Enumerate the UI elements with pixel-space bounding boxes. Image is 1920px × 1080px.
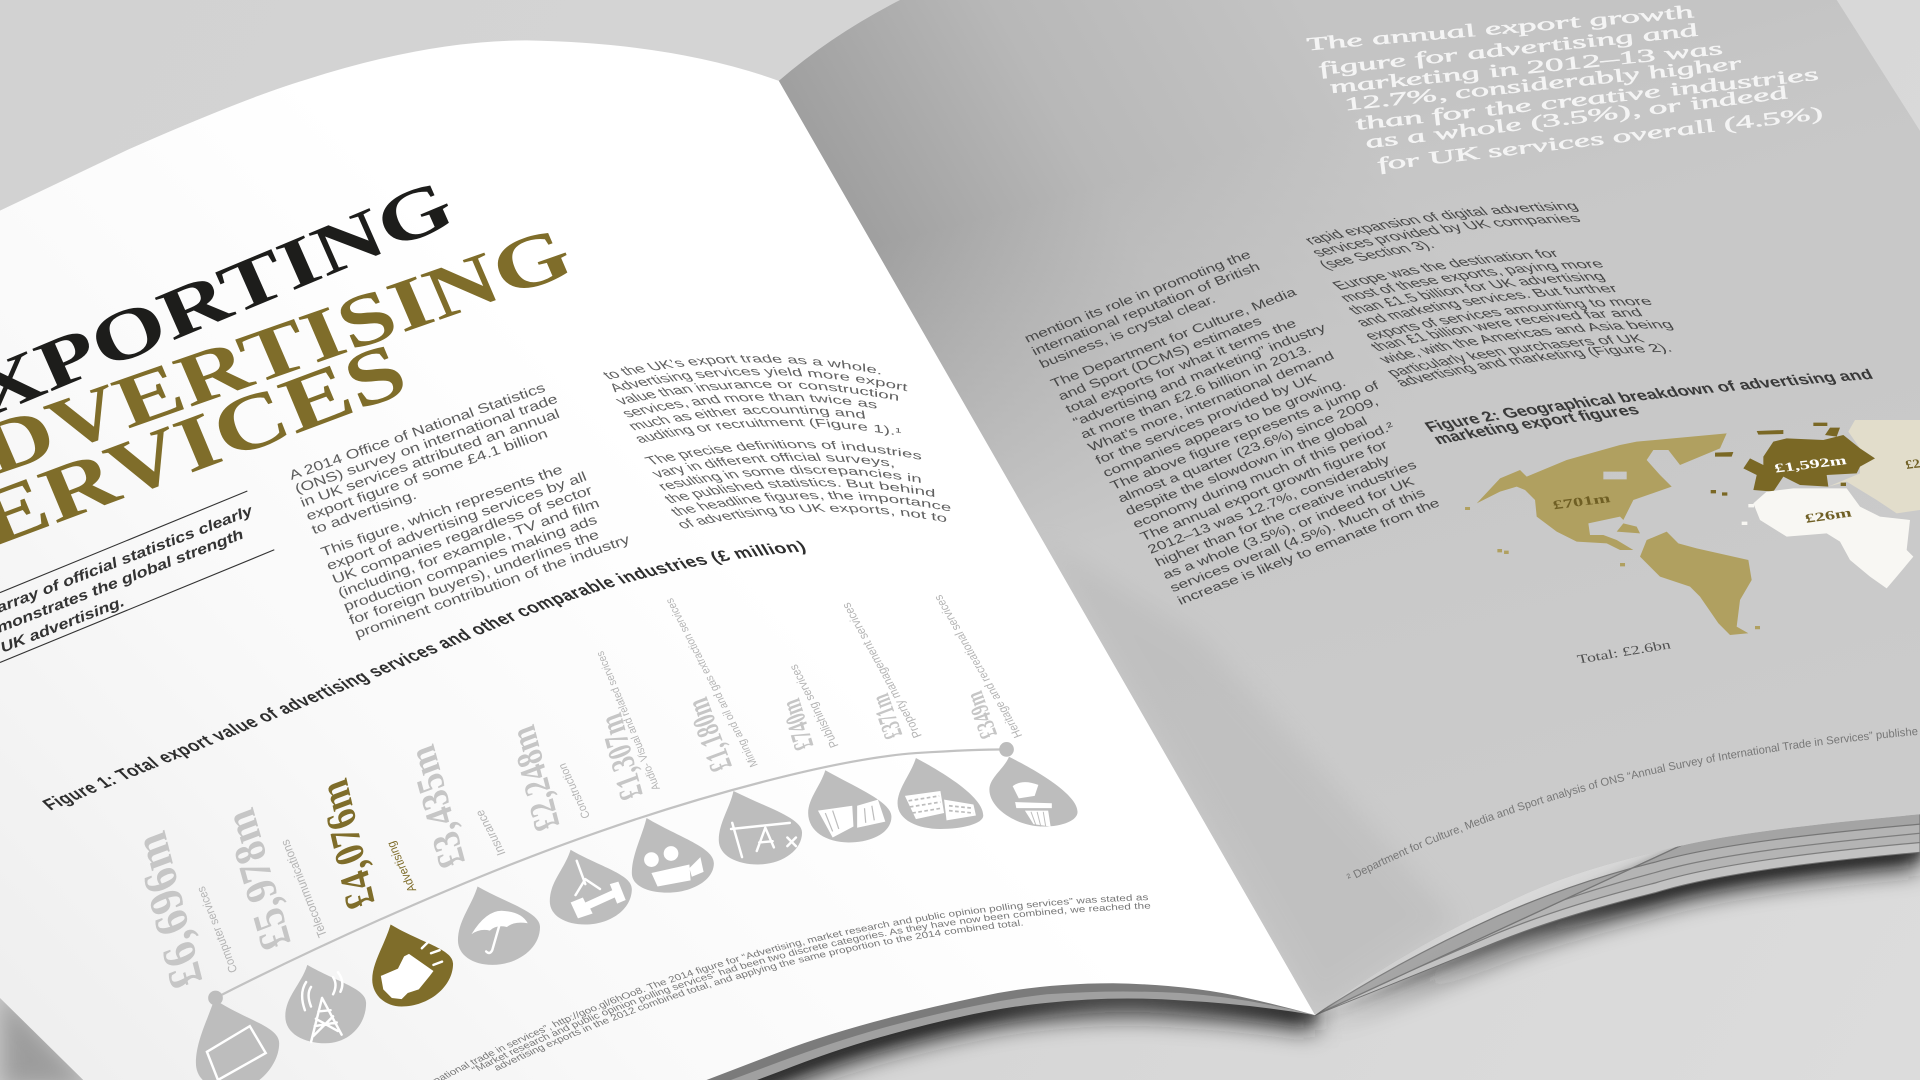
text column: right page column one: mention its role in promoting the bbox=[1022, 248, 1253, 346]
text column: left page column two bbox=[603, 354, 950, 528]
pull quote: 12.7%, considerably higher bbox=[1339, 53, 1747, 114]
value: heritage: Heritage and recreational services bbox=[932, 593, 1025, 739]
text column: right page column one: increase is likely to emanate from the bbox=[1175, 497, 1442, 608]
text column: left page column one: This figure, which represents the bbox=[319, 462, 565, 560]
icon: open book drop bbox=[808, 770, 891, 842]
text column: right page column one: despite the slowdown in the global bbox=[1123, 415, 1370, 518]
map region: Africa bbox=[1742, 488, 1913, 588]
value: telecommunications: Telecommunications bbox=[278, 838, 330, 940]
text column: right page column one: total exports for what it terms the bbox=[1063, 317, 1299, 416]
standfirst with rules bbox=[0, 491, 274, 675]
shadow under left page edge bbox=[0, 986, 98, 1080]
text column: left page column two: of advertising to UK exports, not to bbox=[679, 504, 946, 528]
text column: left page column one bbox=[287, 374, 632, 641]
figure 2: dotted world map bbox=[1465, 420, 1920, 635]
text column: right page column one: business, is crystal clear. bbox=[1037, 293, 1218, 371]
text column: right page column one: companies appears to be growing. bbox=[1101, 376, 1349, 480]
value: property management: Property management services bbox=[839, 601, 925, 740]
text column: right page column one: The Department for Culture, Media bbox=[1048, 286, 1300, 391]
text column: right page column two: (see Section 3). bbox=[1320, 240, 1434, 271]
text column: left page column two: the headline figures, the importance bbox=[671, 490, 950, 516]
page stack: right side sheets and shadow bbox=[1315, 735, 1920, 1030]
icon: heritage column drop bbox=[989, 757, 1078, 827]
value: property management: £371m bbox=[865, 690, 908, 743]
value: insurance: £3,435m bbox=[401, 739, 474, 874]
text column: right page column two: advertising and marketing (Figure 2). bbox=[1398, 344, 1672, 386]
map label: Europe value: £1,592m bbox=[1773, 453, 1849, 475]
value: construction: Construction bbox=[556, 761, 593, 820]
text column: left page column one: in UK services attributed an annual bbox=[298, 407, 562, 510]
pull quote: marketing in 2012–13 was bbox=[1325, 38, 1726, 97]
text column: right page column two: particularly keen purchasers of UK bbox=[1388, 334, 1645, 380]
text column: left page column two: the published statistics. But behind bbox=[664, 478, 934, 503]
value: insurance: Insurance bbox=[472, 808, 509, 857]
icon: megaphone drop bbox=[372, 924, 453, 1007]
footnote: left page: advertising exports in the 2012 combined total, and applying the same proportion to the 2014 combined total. bbox=[494, 920, 1023, 1070]
pull quote: The annual export growth bbox=[1301, 1, 1698, 54]
value: advertising: Advertising bbox=[385, 839, 419, 893]
icon: oil pump drop bbox=[719, 791, 802, 864]
text column: right page column two bbox=[1306, 202, 1674, 386]
text column: right page column one: international reputation of British bbox=[1030, 260, 1263, 359]
footnote: left page: “Market research and public opinion polling services” had been two discrete categories. As they have now been combined, we reached the bbox=[472, 902, 1150, 1071]
value: publishing: Publishing services bbox=[788, 662, 842, 749]
value: audio-visual: Audio- Visual and related services bbox=[594, 649, 663, 792]
value: advertising bbox=[311, 773, 419, 916]
text column: right page column one: almost a quarter (23.6%) since 2009, bbox=[1116, 395, 1381, 506]
value: computer services: Computer services bbox=[195, 884, 240, 974]
text column: right page column two: than £1.5 billion for UK advertising bbox=[1348, 272, 1606, 314]
text column: right page column two: than £1 billion were received far and bbox=[1371, 308, 1642, 351]
text column: left page column one: prominent contribution of the industry bbox=[353, 532, 632, 641]
value: construction: £2,248m bbox=[503, 720, 568, 837]
icon: film camera drop bbox=[632, 818, 714, 893]
text column: left page column one: (ONS) survey on international trade bbox=[293, 392, 560, 497]
icon: construction pipe drop bbox=[550, 850, 632, 924]
text column: right page column two: exports of services amounting to more bbox=[1367, 298, 1652, 340]
pull quote: as a whole (3.5%), or indeed bbox=[1360, 82, 1793, 152]
text column: left page column two: The precise definitions of industries bbox=[644, 440, 922, 464]
text column: right page column one: services overall (4.5%). Much of this bbox=[1168, 487, 1428, 595]
value: publishing: £740m bbox=[776, 694, 820, 754]
map region: Asia and Oceania bbox=[1828, 420, 1920, 513]
text column: left page column two: much as either accounting and bbox=[629, 406, 865, 430]
text column: right page column two: services provided by UK companies bbox=[1314, 214, 1580, 257]
text column: right page column two: most of these exports, paying more bbox=[1341, 261, 1603, 302]
map total: Total: £2.6bn bbox=[1576, 639, 1672, 667]
text column: left page column two: value than insurance or construction bbox=[616, 382, 898, 404]
value: insurance bbox=[401, 739, 509, 874]
value: audio-visual: £1,307m bbox=[593, 708, 650, 805]
text column: left page column two: vary in different official surveys, bbox=[652, 452, 894, 478]
map label: Africa value: £26m bbox=[1804, 505, 1854, 526]
text column: right page column two: rapid expansion of digital advertising bbox=[1306, 202, 1579, 245]
icon: buildings drop bbox=[898, 758, 983, 829]
value: telecommunications: £5,978m bbox=[216, 802, 301, 957]
text column: left page column one: UK companies regardless of sector bbox=[330, 483, 595, 587]
page stack: left side sheets and shadow bbox=[698, 980, 1315, 1080]
value: mining: £1,180m bbox=[679, 693, 739, 777]
pull quote: for UK services overall (4.5%) bbox=[1372, 103, 1827, 174]
text column: right page column two: Europe was the destination for bbox=[1332, 250, 1557, 290]
pull quote: than for the creative industries bbox=[1350, 64, 1822, 134]
text column: right page column two: wide, with the Americas and Asia being bbox=[1380, 320, 1674, 364]
text column: left page column one: export figure of some £4.1 billion bbox=[304, 427, 550, 524]
text column: left page column one: (including, for example, TV and film bbox=[336, 496, 602, 601]
value: computer services: £6,696m bbox=[124, 825, 212, 996]
text column: left page column one: for foreign buyers), underlines the bbox=[347, 528, 601, 628]
icon: telecom tower drop bbox=[285, 965, 366, 1043]
pull quote bbox=[1301, 1, 1827, 174]
text column: right page column one: 2012–13 was 12.7%, considerably bbox=[1145, 453, 1393, 557]
icon: umbrella drop bbox=[458, 887, 540, 965]
text column: right page column one bbox=[1022, 232, 1449, 608]
text column: left page column one: export of advertising services by all bbox=[325, 470, 589, 573]
figure 1 heading: Figure 1: Total export value of advertising services and other comparable industries (£ million) bbox=[42, 540, 806, 810]
text column: right page column one: The annual export growth figure for bbox=[1138, 439, 1390, 544]
text column: left page column one: A 2014 Office of National Statistics bbox=[287, 381, 548, 483]
text column: left page column two: services, and more than twice as bbox=[624, 392, 877, 418]
text column: right page column one: The above figure represents a jump of bbox=[1108, 379, 1382, 493]
text column: left page column one: production companies making ads bbox=[342, 513, 600, 614]
text column: right page column one: as a whole (3.5%), or indeed for UK bbox=[1160, 475, 1417, 582]
text column: right page column one: and Sport (DCMS) estimates bbox=[1056, 315, 1264, 404]
text column: left page column two: auditing or recruitment (Figure 1).¹ bbox=[636, 418, 902, 443]
figure 2 heading: Figure 2: Geographical breakdown of advertising and bbox=[1424, 368, 1873, 432]
text column: right page column one: “advertising and marketing” industry bbox=[1071, 321, 1329, 429]
text column: left page column one: to advertising. bbox=[310, 488, 419, 537]
text column: right page column one: economy during much of this period.² bbox=[1131, 420, 1397, 531]
footnote: right page: ² Department for Culture, Media and Sport analysis of ONS “Annual Survey of International Trade in Services” published bbox=[1346, 728, 1918, 879]
map label: Americas value: £701m bbox=[1551, 491, 1612, 512]
text column: right page column one: higher than for the creative industries bbox=[1153, 459, 1419, 570]
value: heritage: £349m bbox=[960, 688, 1003, 743]
text column: left page column two: Advertising services yield more export bbox=[612, 367, 908, 392]
pull quote: figure for advertising and bbox=[1313, 19, 1704, 79]
map region: Americas bbox=[1465, 433, 1760, 635]
value: mining: Mining and oil and gas extraction services bbox=[663, 596, 761, 769]
text column: right page column one: at more than £2.6 billion in 2013. bbox=[1078, 343, 1314, 442]
value: advertising: £4,076m bbox=[311, 773, 384, 916]
text column: right page column one: for the services provided by UK bbox=[1093, 372, 1319, 467]
map region: Europe bbox=[1711, 423, 1875, 496]
text column: right page column one: What’s more, international demand bbox=[1086, 350, 1337, 455]
text column: left page column two: to the UK’s export trade as a whole. bbox=[603, 354, 880, 380]
figure 1: connecting curve bbox=[208, 742, 1014, 1005]
panel: left page bbox=[0, 40, 1315, 1080]
figure 2 heading: marketing export figures bbox=[1434, 406, 1639, 444]
text column: right page column two: and marketing services. But further bbox=[1358, 284, 1616, 326]
text column: left page column two: resulting in some discrepancies in bbox=[659, 465, 921, 490]
icon: computer drop bbox=[196, 999, 279, 1080]
